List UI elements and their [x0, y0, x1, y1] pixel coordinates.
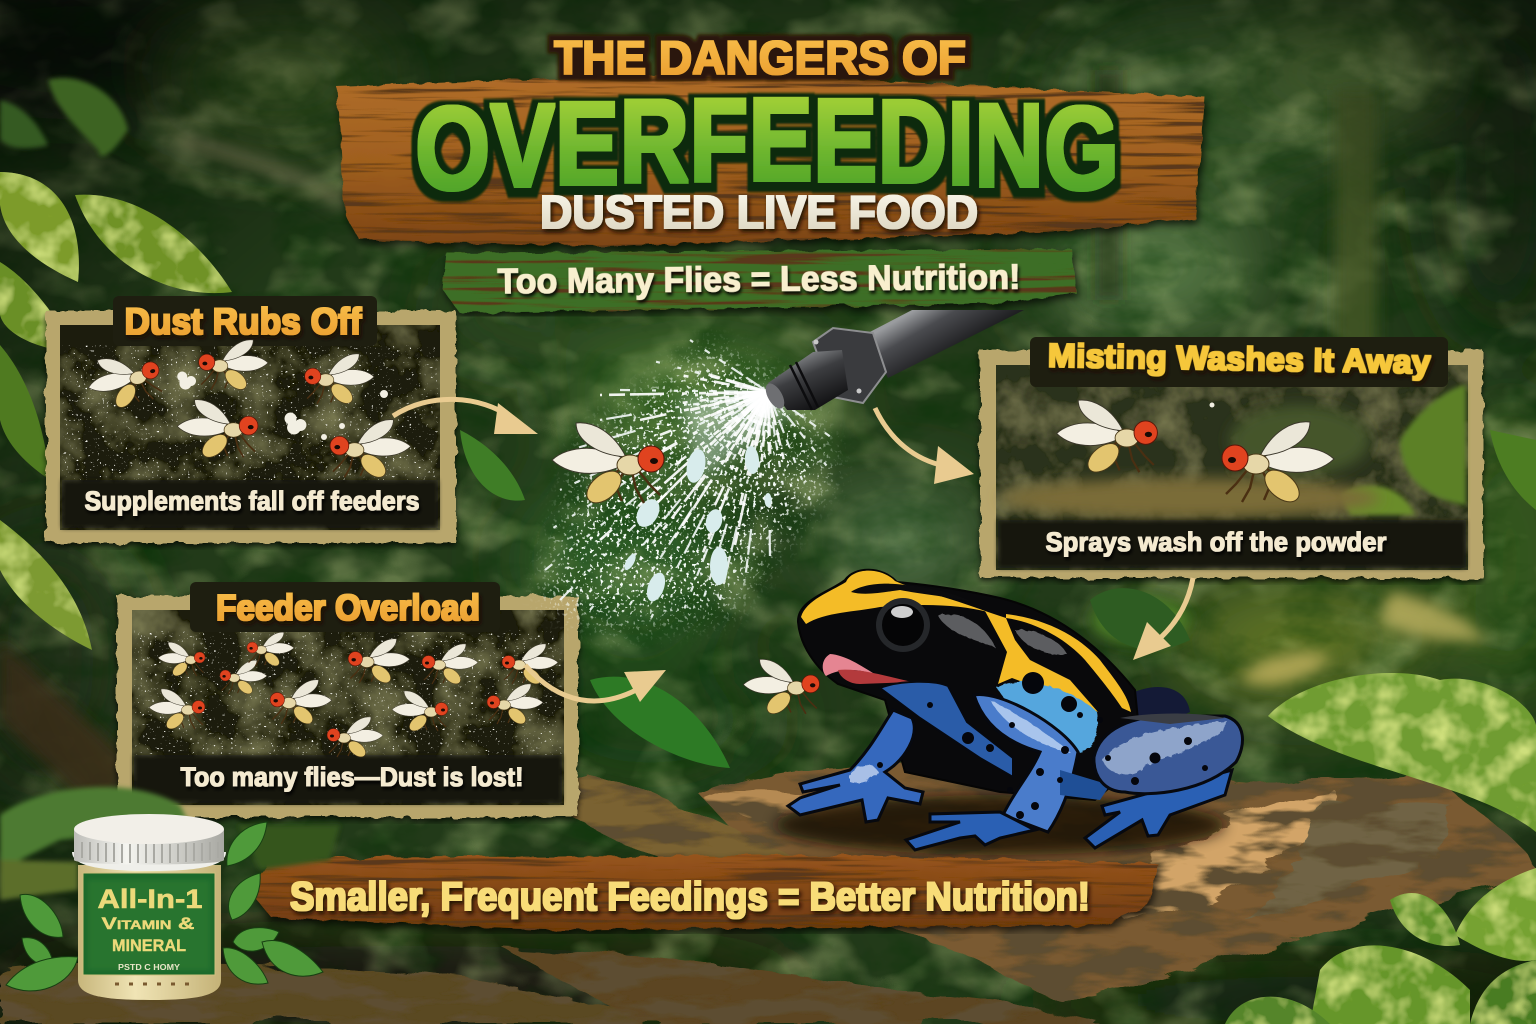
bottom sign: smaller frequent feedings: Smaller, Frequent Feedings = Better Nutrition!: [290, 875, 1090, 919]
misting nozzle pipe: [762, 310, 1024, 412]
jar label text: MINERAL: [112, 936, 186, 955]
dark bar on head: [851, 584, 972, 602]
frog eye: [876, 598, 930, 652]
jar base dots: [115, 982, 195, 986]
yellow shoulder band: [985, 611, 1098, 712]
yellow head: [801, 571, 988, 624]
foliage: bottom-right plants: [1225, 868, 1536, 1024]
jar label text: Vitamin &: [102, 914, 194, 933]
jar label mottling: [88, 880, 210, 970]
grey sheen on black: [938, 614, 1068, 655]
jar body: [78, 865, 221, 1000]
foliage: right leaves: [1090, 588, 1190, 650]
panel: dust rubs off: [46, 296, 456, 543]
fly near spray: [552, 423, 664, 509]
moss behind jar: [0, 787, 340, 900]
jar cap: [72, 814, 226, 871]
flies in dust panel: [82, 340, 411, 482]
light blue flank: [997, 682, 1098, 752]
panel: feeder overload: [117, 582, 578, 817]
back leg hump: [1120, 687, 1190, 740]
supplement jar with leaves: [0, 787, 340, 1000]
jar label: [83, 873, 215, 975]
front foot blue: [906, 812, 1035, 850]
front leg highlight: [990, 700, 1070, 752]
upper arm blue: [880, 682, 1013, 777]
big foreground leaf: [1268, 673, 1536, 832]
arrow: overload panel to leaf: [525, 665, 666, 702]
front leg blue: [974, 695, 1078, 832]
front-left arm highlight: [850, 765, 878, 783]
title sign: wooden board: [337, 72, 1205, 246]
front-left arm and foot: [788, 710, 923, 822]
flies in misting panel: [1057, 400, 1334, 508]
rear haunch: [1094, 716, 1242, 794]
fly at frog tongue: [743, 659, 819, 718]
jar leaves: [6, 822, 323, 991]
jar label text: All-In-1: [98, 884, 202, 914]
foliage: left leaves: [0, 78, 1536, 768]
tree log: main: [700, 766, 1536, 1000]
arrow: misting panel to frog: [1133, 578, 1193, 660]
hex nut: [813, 328, 886, 403]
flies in overload panel: [149, 632, 558, 760]
jar label text: [98, 884, 202, 972]
rear belly: [1060, 770, 1110, 800]
title text: THE DANGERS OF: [554, 31, 966, 84]
frog: [775, 570, 1242, 855]
frog spots: [877, 672, 1208, 819]
subtitle green banner: Too Many Flies = Less Nutrition!: [497, 258, 1021, 301]
yellow back stripe: [1006, 614, 1131, 712]
tree log: lower-left roots: [0, 772, 1100, 1024]
panel: misting washes it away: Sprays wash off the powder: [1046, 527, 1387, 557]
subtitle green banner: [443, 249, 1076, 313]
panel title plate: Misting Washes It Away: [1047, 337, 1432, 380]
frog shadow: [775, 795, 1225, 855]
panel title plate: Feeder Overload: [216, 587, 480, 628]
title text: [415, 31, 1119, 238]
blurred branches and trunks: [0, 70, 1490, 830]
water spray: [545, 340, 835, 625]
panel title plate: Dust Rubs Off: [124, 301, 362, 342]
jar label text: PSTD C HOMY: [118, 963, 181, 972]
title text: DUSTED LIVE FOOD: [540, 186, 978, 238]
bottom sign: smaller frequent feedings: [250, 855, 1158, 930]
panel: dust rubs off: Supplements fall off feeders: [84, 486, 420, 516]
rear foot: [1085, 770, 1232, 848]
panel: misting washes it away: [980, 337, 1483, 578]
title text: OVERFEEDING: [415, 73, 1119, 214]
nozzle barrel: [768, 350, 848, 410]
frog body: [798, 570, 1142, 800]
arrow: nozzle to misting panel: [875, 408, 974, 484]
panel: feeder overload: Too many flies—Dust is lost!: [180, 762, 524, 792]
pipe: [866, 310, 1024, 378]
open mouth and tongue: [823, 654, 878, 676]
arrow: dust panel to spray: [393, 399, 538, 434]
